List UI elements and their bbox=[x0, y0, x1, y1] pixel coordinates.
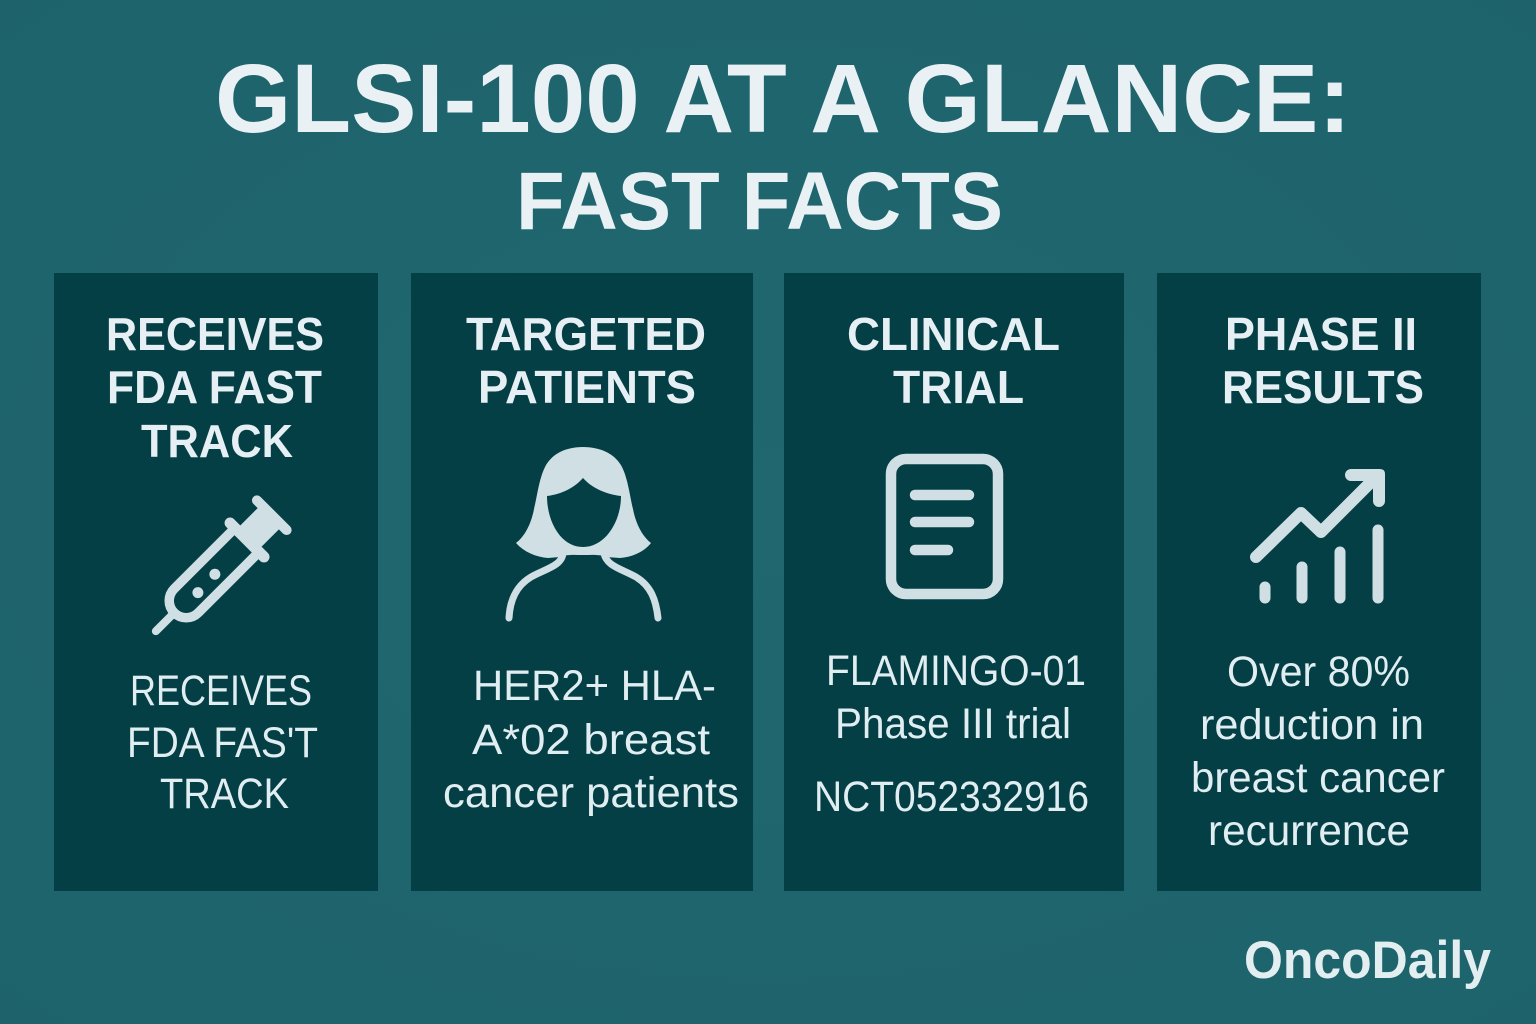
heading: targeted patients bbox=[466, 308, 706, 413]
body text: receives FDA fast track bbox=[127, 667, 318, 818]
heading: receives FDA fast track: TRACK bbox=[141, 415, 293, 467]
body text: receives FDA fast track: TRACK bbox=[160, 770, 289, 818]
title: FAST FACTS bbox=[516, 156, 1003, 247]
heading: phase II results: PHASE II bbox=[1225, 308, 1417, 360]
body text: results: breast cancer bbox=[1191, 754, 1445, 802]
panel: phase II results bbox=[1157, 273, 1481, 891]
body text: trial details: Phase III trial bbox=[835, 700, 1071, 748]
heading: clinical trial: TRIAL bbox=[893, 361, 1024, 413]
icon: woman bbox=[509, 447, 658, 618]
body text: patient population: A*02 breast bbox=[472, 716, 710, 764]
heading: targeted patients: PATIENTS bbox=[478, 361, 696, 413]
title bbox=[215, 44, 1351, 247]
panel: targeted patients bbox=[411, 273, 753, 891]
heading: clinical trial: CLINICAL bbox=[847, 308, 1060, 360]
heading: phase II results bbox=[1222, 308, 1424, 413]
heading: receives FDA fast track bbox=[106, 308, 324, 467]
body text: patient population: cancer patients bbox=[443, 769, 739, 817]
heading: receives FDA fast track: RECEIVES bbox=[106, 308, 324, 360]
heading: phase II results: RESULTS bbox=[1222, 361, 1424, 413]
logo: OncoDaily: OncoDaily bbox=[1244, 931, 1491, 990]
body text: results: reduction in bbox=[1200, 701, 1424, 749]
body text: results: recurrence bbox=[1208, 807, 1410, 855]
body text: patient population bbox=[443, 662, 739, 817]
body text: trial details bbox=[814, 647, 1089, 821]
body text: patient population: HER2+ HLA- bbox=[473, 662, 716, 710]
body text: receives FDA fast track: RECEIVES bbox=[130, 667, 312, 715]
icon: rising chart bbox=[1256, 469, 1385, 598]
heading: receives FDA fast track: FDA FAST bbox=[107, 361, 322, 413]
panel: FDA fast track bbox=[54, 273, 378, 891]
title: GLSI-100 AT A GLANCE: bbox=[215, 44, 1351, 153]
body text: receives FDA fast track: FDA FAS'T bbox=[127, 719, 318, 767]
icon: document bbox=[891, 459, 998, 594]
heading: targeted patients: TARGETED bbox=[466, 308, 706, 360]
body text: results: Over 80% bbox=[1227, 648, 1410, 696]
body text: trial details: NCT052332916 bbox=[814, 773, 1089, 821]
heading: clinical trial bbox=[847, 308, 1060, 413]
body text: trial details: FLAMINGO-01 bbox=[826, 647, 1086, 695]
panel: clinical trial bbox=[784, 273, 1124, 891]
icon: syringe bbox=[139, 498, 289, 648]
body text: results bbox=[1191, 648, 1445, 855]
